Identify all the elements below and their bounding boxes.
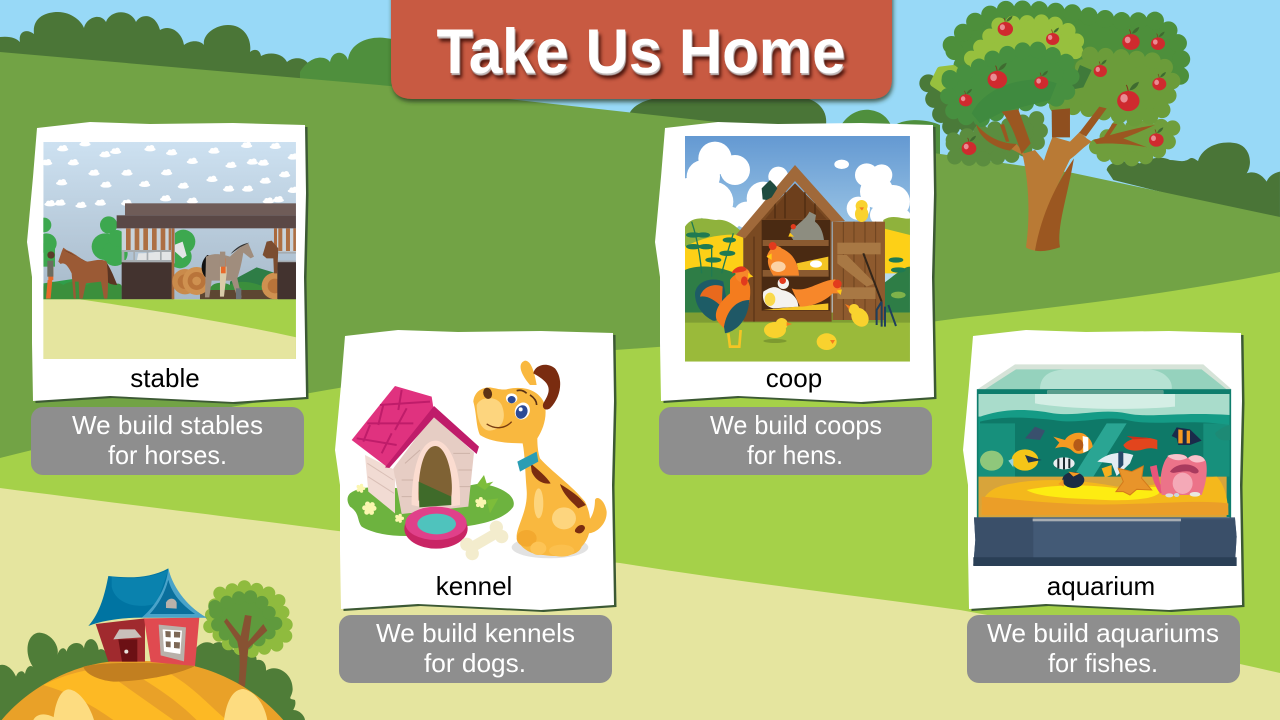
ground and bushes <box>43 281 277 299</box>
label: coop: coop <box>766 363 822 393</box>
panel: kennel <box>335 330 616 683</box>
small tree <box>208 587 288 687</box>
bush behind hill, left <box>0 12 320 90</box>
caption box: kennel: We build kennels <box>376 618 575 648</box>
starfish <box>1116 466 1152 495</box>
far fields <box>685 218 743 270</box>
panel: stable <box>27 122 308 475</box>
illustration: fish aquarium <box>973 364 1237 566</box>
bone <box>458 518 511 563</box>
chicks <box>763 200 872 350</box>
scene foreground <box>43 299 296 359</box>
water bowl <box>404 507 468 549</box>
cream path <box>0 488 1280 720</box>
clouds <box>673 142 911 230</box>
caption box: kennel <box>339 615 612 683</box>
caption box: stable: for horses. <box>108 440 227 470</box>
bush right of banner <box>628 96 826 140</box>
rooster <box>695 266 753 347</box>
pitchfork <box>863 253 896 327</box>
card background <box>335 330 616 612</box>
house <box>88 568 207 666</box>
caption box: aquarium: We build aquariums <box>987 618 1219 648</box>
label: stable: stable <box>130 363 200 393</box>
title: Take Us Home <box>436 17 846 87</box>
caption box: coop <box>659 407 932 475</box>
flowers <box>358 475 498 521</box>
right horse <box>263 241 278 273</box>
bush, mid green <box>300 38 400 100</box>
caption box: coop: for hens. <box>747 440 843 470</box>
caption box: aquarium <box>967 615 1240 683</box>
apple tree <box>928 9 1182 251</box>
coop building <box>736 165 885 322</box>
bush, far right <box>1107 142 1280 220</box>
brown horse and handler <box>46 248 117 299</box>
crow <box>762 180 777 200</box>
white horse <box>137 242 187 263</box>
illustration: dog and kennel <box>347 361 607 563</box>
plants <box>687 222 905 277</box>
dog <box>473 361 607 558</box>
light green hill <box>0 272 1280 720</box>
panel: coop <box>655 122 936 475</box>
panel: aquarium <box>963 330 1244 683</box>
bushes behind house <box>0 633 305 720</box>
hay bales <box>172 262 296 299</box>
tree trunk <box>976 107 1155 251</box>
tank base <box>973 517 1237 566</box>
label: aquarium: aquarium <box>1047 571 1155 601</box>
caption box: kennel: for dogs. <box>424 648 526 678</box>
caption box: stable: We build stables <box>72 410 263 440</box>
dark green hill <box>0 52 1280 500</box>
caption box: coop: We build coops <box>710 410 882 440</box>
card background <box>963 330 1244 612</box>
card background <box>655 122 936 404</box>
caption box: aquarium: for fishes. <box>1048 648 1158 678</box>
trees <box>37 216 195 268</box>
illustration: chicken coop <box>673 136 911 362</box>
stalls <box>117 203 296 299</box>
tank lid <box>977 364 1232 389</box>
dog house <box>352 386 479 514</box>
bush, mid green right <box>838 110 940 170</box>
fish <box>980 425 1230 488</box>
caption box: stable <box>31 407 304 475</box>
illustration: horses at a stable <box>37 140 299 359</box>
label: kennel: kennel <box>436 571 512 601</box>
grass <box>347 483 514 536</box>
coral <box>1150 454 1207 497</box>
tank frame <box>978 390 1230 518</box>
title banner <box>391 0 892 99</box>
apples <box>959 16 1166 155</box>
hill <box>2 661 283 720</box>
hens <box>763 212 842 310</box>
card background <box>27 122 308 404</box>
grey horse and groom <box>202 243 254 299</box>
grass <box>685 313 910 362</box>
farmhouse on hill <box>0 568 305 720</box>
water <box>978 393 1230 517</box>
